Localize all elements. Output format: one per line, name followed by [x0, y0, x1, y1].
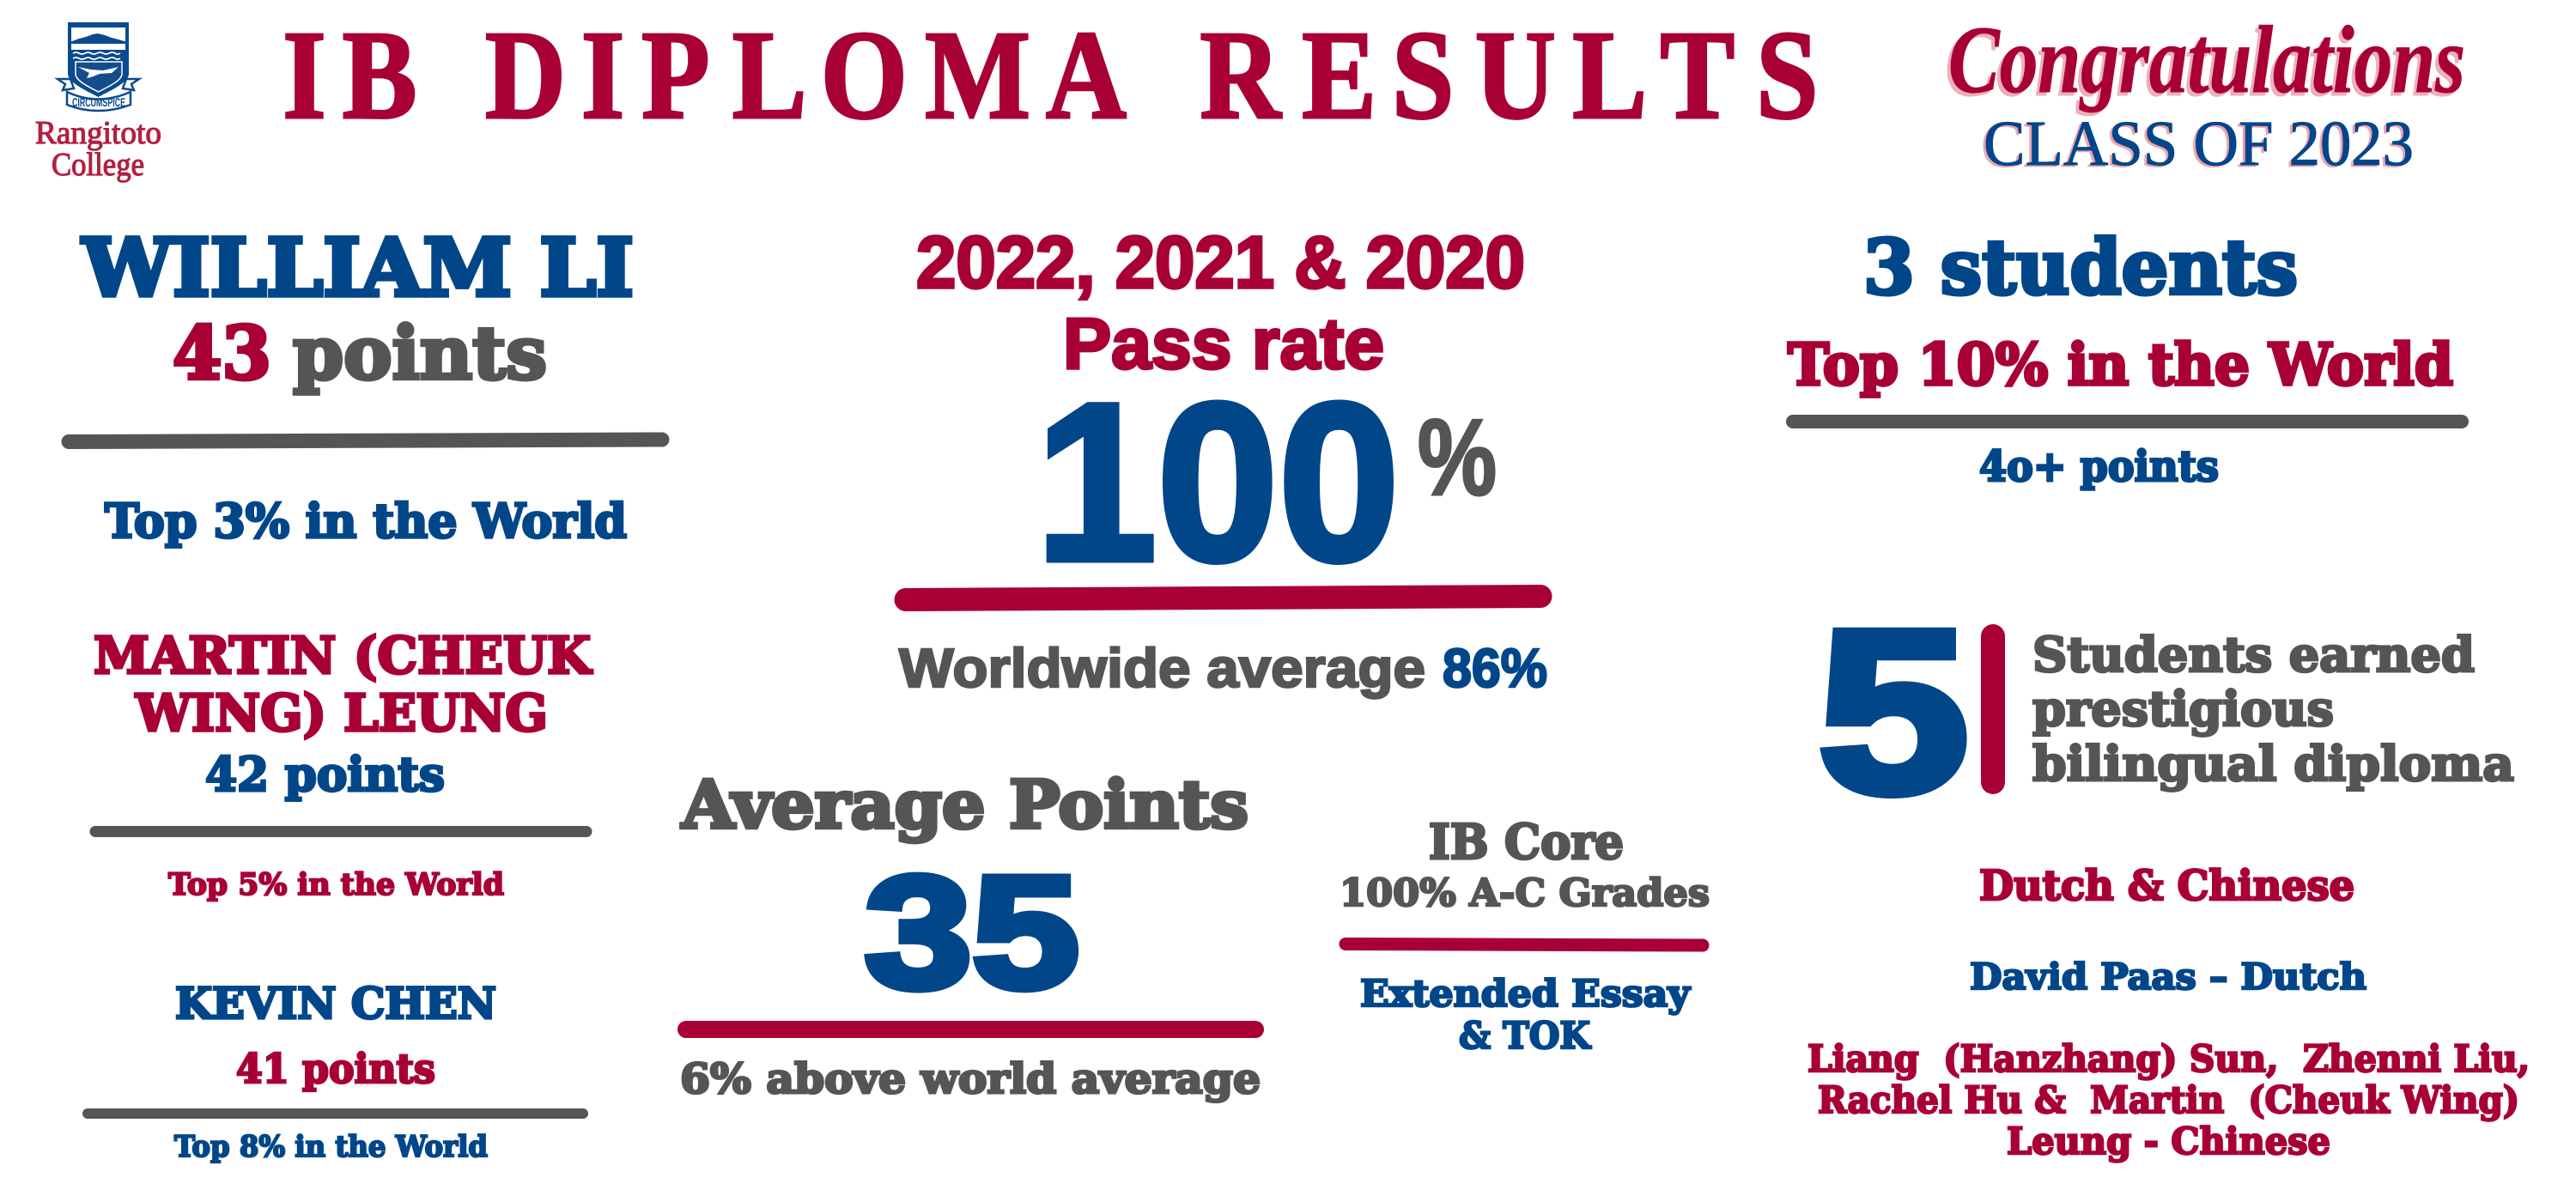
worldwide average: 86%: [1443, 637, 1547, 699]
Dutch student: David Paas – Dutch: [1970, 956, 2366, 998]
William Li points: [173, 311, 547, 397]
class of 2023: CLASS OF 2023: [1981, 110, 2411, 181]
above world average: 6% above world average: [680, 1055, 1261, 1103]
Martin Leung name: MARTIN (CHEUK: [94, 626, 593, 685]
pass rate label: Pass rate: [1063, 303, 1384, 384]
top 10 percent: Top 10% in the World: [1788, 331, 2453, 398]
bilingual description: bilingual diploma: [2032, 736, 2514, 792]
panel: bilingual diploma: [1807, 583, 2530, 1163]
bilingual description: Students earned: [2032, 627, 2475, 683]
William Li points: points: [293, 311, 547, 397]
Chinese students: Rachel Hu & Martin (Cheuk Wing): [1818, 1079, 2519, 1122]
core grades: 100% A-C Grades: [1340, 871, 1710, 915]
panel: IB core: [1340, 814, 1710, 1058]
William Li name: WILLIAM LI: [82, 222, 634, 314]
logo name: Rangitoto: [35, 115, 161, 151]
panel: top students: [69, 222, 662, 1164]
William Li ranking: Top 3% in the World: [105, 493, 627, 549]
title: IBDIPLOMARESULTS: [283, 5, 1819, 146]
class of 2023: CLASS OF 2023: [1984, 108, 2414, 179]
pass rate years: 2022, 2021 & 2020: [916, 222, 1525, 304]
icon: crest shield: [58, 22, 139, 111]
IB core heading: IB Core: [1429, 814, 1624, 871]
Kevin Chen name: KEVIN CHEN: [175, 978, 496, 1029]
congratulations script: Congratulations: [1948, 7, 2465, 113]
100 figure: 100: [1036, 356, 1400, 608]
core components: Extended Essay: [1360, 973, 1692, 1016]
5 figure: 5: [1818, 583, 1969, 841]
Kevin Chen ranking: Top 8% in the World: [174, 1130, 488, 1164]
panel: three students top 10 percent: [1788, 222, 2462, 491]
bilingual description: prestigious: [2032, 681, 2334, 738]
panel: pass rate: [899, 222, 1547, 699]
Chinese students: Leung - Chinese: [2007, 1120, 2330, 1163]
percent sign: %: [1418, 397, 1497, 518]
languages heading: Dutch & Chinese: [1979, 862, 2354, 910]
worldwide average: Worldwide average: [899, 637, 1425, 699]
Chinese students: Liang (Hanzhang) Sun, Zhenni Liu,: [1807, 1038, 2530, 1081]
35 figure: 35: [865, 844, 1079, 1022]
logo name: [35, 115, 161, 183]
congratulations heading: [1945, 7, 2465, 181]
core components: & TOK: [1459, 1015, 1592, 1058]
forty plus points: 4o+ points: [1979, 441, 2219, 491]
average points heading: Average Points: [681, 767, 1249, 844]
logo: Rangitoto College crest and name: [35, 22, 161, 183]
core components: [1360, 973, 1692, 1058]
Kevin Chen points: 41 points: [236, 1046, 435, 1093]
Martin Leung name: [94, 626, 593, 743]
bilingual description: [2032, 627, 2514, 792]
icon: crest shield: CIRCUMSPICE: [72, 95, 125, 109]
Martin Leung ranking: Top 5% in the World: [168, 867, 504, 902]
panel: average points: [680, 767, 1261, 1103]
logo name: College: [52, 147, 144, 183]
three students heading: 3 students: [1863, 222, 2298, 312]
Chinese students: [1807, 1038, 2530, 1163]
Martin Leung name: WING) LEUNG: [135, 683, 548, 743]
William Li points: 43: [173, 311, 271, 397]
congratulations script: Congratulations: [1945, 10, 2462, 117]
Martin Leung points: 42 points: [205, 746, 445, 802]
